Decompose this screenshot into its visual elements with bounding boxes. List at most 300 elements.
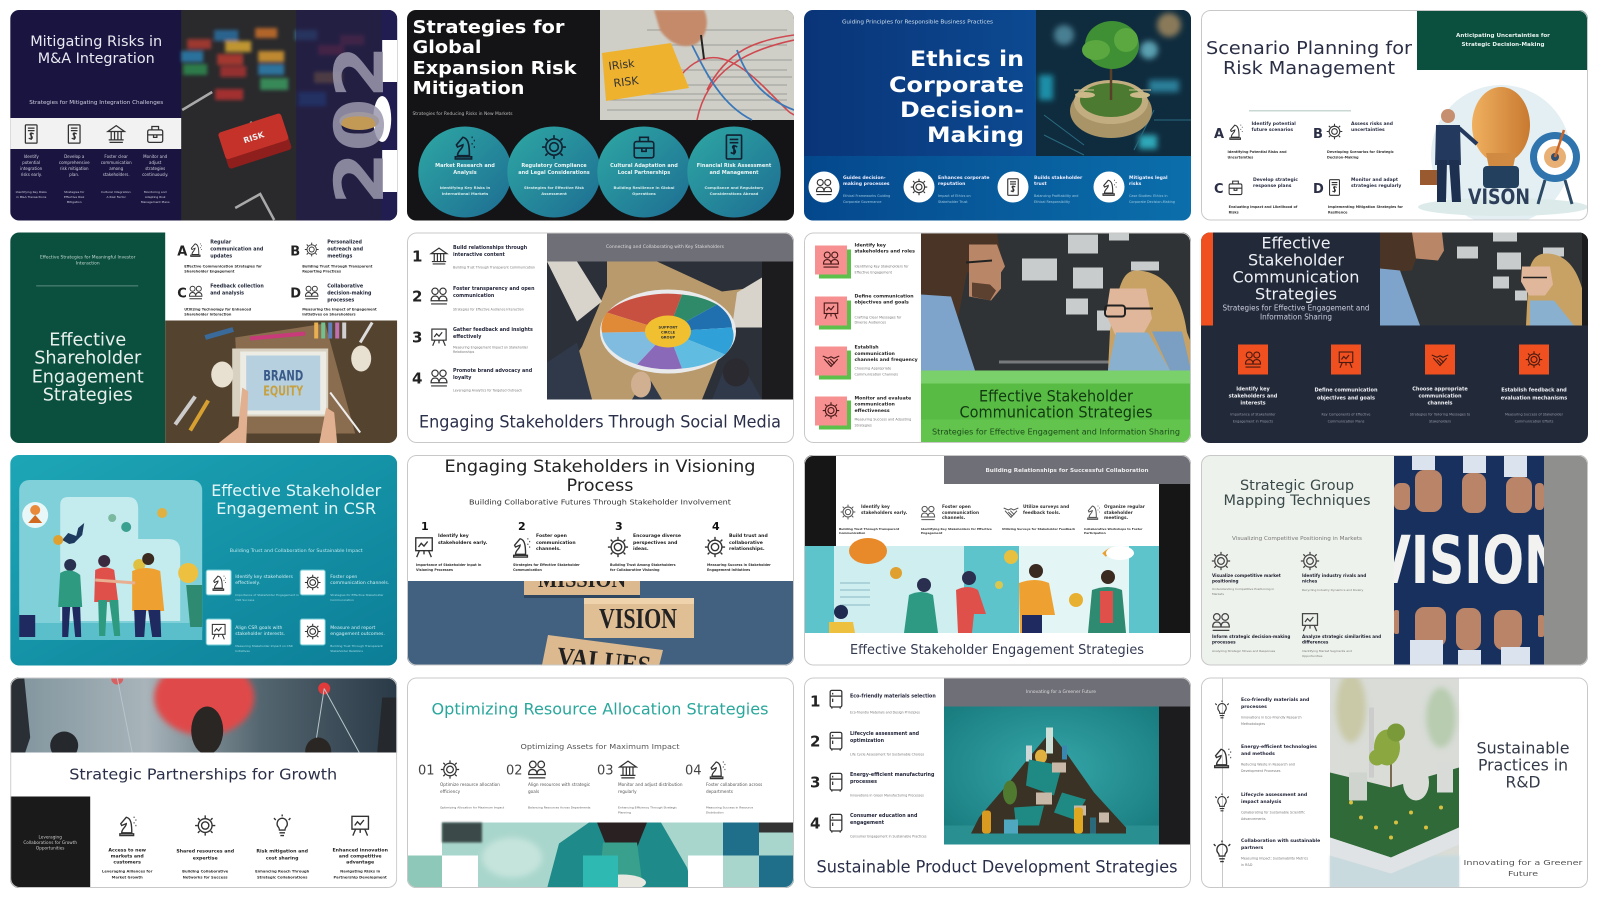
subtitle [1464,859,1583,878]
item 2: Identify industry rivals and [1302,573,1366,578]
icon: document [68,125,80,143]
four steps text: among [109,166,124,171]
icon: appliances [830,814,842,833]
item: trust: Builds stakeholder [1034,175,1083,181]
subtitle: Building Trust and Collaboration for Sustainable Impact [230,548,363,554]
item D: D [1313,182,1324,197]
subtitle: Future [1508,870,1538,878]
item 2 [300,570,389,602]
item 1 [102,817,153,880]
title: Process [566,476,634,496]
photo: colleagues at chalkboard [921,232,1191,370]
item 1: stakeholders and roles [854,248,915,254]
item 02 [506,761,591,810]
item 3 [1410,344,1470,424]
photo: brand equity tablet [165,320,397,444]
item: trust: Balancing Profitability and [1034,194,1078,198]
four steps text: plan. [69,172,79,177]
title: M&A Integration [38,51,155,67]
step 3: Building Trust Among Stakeholders [610,563,676,567]
item A: communication and [210,246,264,252]
photo: brand equity tablet: BRAND [263,368,303,384]
photo: risk sticky note on map: IRisk [608,57,636,73]
title: Optimizing Resource Allocation Strategies [432,700,768,718]
step 2 [513,520,580,572]
item B: B [290,244,300,260]
icon: chart [212,624,225,639]
item C: Feedback collection [210,284,264,290]
step 3 [608,520,681,572]
icon: document [1330,180,1339,195]
item 3: Gather feedback and insights [453,327,533,333]
item 1: customers [113,860,141,866]
item 1: Identify key [861,504,890,510]
item 4: Measure and report [330,625,376,631]
icon: board [1302,614,1318,631]
item 2: communication [453,293,495,299]
oval: Market Research: Analysis [453,170,477,176]
item 2: objectives and goals [1317,396,1375,402]
icon: handshake [1004,508,1018,517]
item 04: departments [706,789,733,794]
item 4: meetings. [1104,515,1129,521]
title [960,386,1152,422]
photo: risk key tiles [181,10,400,220]
item 4: Partnership Development [334,876,387,880]
icon: people [431,370,447,386]
item 03: Planning [618,810,631,814]
icon: briefcase [148,126,163,142]
photo: wooden blocks [407,567,794,681]
icon: knight [191,244,202,256]
item 3: Risk mitigation and [256,848,308,854]
item 2: 2 [810,732,820,750]
item D: Initiatives on Shareholders [302,312,356,316]
title: Engaging Stakeholders in Visioning [444,457,756,477]
icon: briefcase [634,137,654,158]
item 2 [1215,744,1317,773]
item 01: Optimizing Allocation for Maximum Impact [440,806,505,810]
title: Effective Stakeholder [211,481,382,500]
photo: support circle group: SUPPORT [659,326,678,330]
item 04 [685,762,762,814]
item 1: Identify key [854,242,886,248]
item D: Resilience [1328,210,1348,214]
item: decision-making [808,172,890,204]
icon: knight [514,539,530,557]
item 4: Measuring Success and Adjusting [854,418,911,422]
item 4: loyalty [453,375,472,381]
eyebrow: Guiding Principles for Responsible Business Practices [842,20,994,26]
icon: handshake [1432,355,1448,366]
item 3: Strategic Collaborations [257,876,308,880]
step 1: Visioning Processes [416,568,453,572]
item 4: Opportunities [1302,654,1323,658]
oval: Regulatory Compliance [507,126,601,218]
icon: people board [824,303,838,319]
item 3: Innovations in Green Manufacturing Processes [850,794,924,798]
item 1: Innovations in Eco-Friendly Research [1241,716,1302,720]
four steps text: A Risk Factor [107,195,127,199]
item 2: Foster transparency and open [453,286,535,292]
icon: gear [305,624,320,639]
icon: briefcase [1229,181,1242,195]
panel: Engaging Stakeholders Through Social Media [407,232,794,443]
item 2: Networks for Success [183,876,228,880]
title: R&D [1506,772,1540,792]
item 1: Access to new [108,848,147,854]
icon: gear [305,243,319,256]
photo: colleagues at chalkboard [1380,232,1588,326]
title: Mapping Techniques [1224,493,1370,509]
icon: people [824,252,838,267]
icon: knight [1215,749,1231,768]
item 02: goals [528,789,539,794]
panel: Effective Stakeholder Communication Strategies (green) [804,232,1191,444]
four steps text: Strategies for [64,190,85,194]
icon: document [726,135,742,159]
step 1: Importance of Stakeholder Input in [416,563,482,567]
title: Stakeholder [1248,250,1344,270]
item 4: Measuring Success of Stakeholder [1505,412,1564,416]
title [32,330,144,406]
step 4 [705,520,771,572]
four steps text: Develop a [64,154,85,159]
item 4: Communication Efforts [1515,420,1554,424]
icon: board [1339,352,1353,368]
photo: pile of recycled products [944,706,1159,844]
item 3: feedback tools. [1023,510,1061,516]
item: legal risks: Case Studies: Ethics in [1129,194,1168,198]
item 3: Choosing Appropriate [854,366,891,370]
item A: Uncertainties [1228,156,1253,160]
item 4: engagement [850,820,885,826]
illustration: team shaking hands [804,538,1159,633]
item 2: objectives and goals [854,300,909,306]
item 4: partners [1241,845,1264,851]
item 3: Enhancing Reach Through [255,870,310,874]
item A: Shareholder Engagement [184,270,235,274]
item 2: Foster open [942,504,971,510]
item 1: Importance of Stakeholder [1230,412,1276,416]
title [889,47,1024,147]
four steps text: Foster clear [104,154,128,159]
item 4: Promote brand advocacy and [453,368,533,374]
item 3 [1002,504,1076,531]
item 1 [412,245,535,270]
item 2: Building Collaborative [182,870,229,874]
item 4 [332,816,388,880]
item: legal risks [1094,172,1175,204]
item: legal risks: Mitigates legal [1129,175,1168,181]
item B: B [1313,127,1323,142]
item 4: Collaborative Workshops to Foster [1084,527,1143,531]
item 2: channels. [942,515,966,521]
step 4: Engagement Initiatives [707,568,750,572]
four steps text: communication [101,160,132,165]
black caption box: Leveraging [39,834,62,840]
item 2: Recycling Industry Dynamics and Rivalry [1302,588,1364,592]
item B: uncertainties [1351,127,1385,133]
header box: Strategic Decision-Making [1462,42,1544,48]
item C: and analysis [210,290,244,296]
item 03: Monitor and adjust distribution [618,782,683,787]
title: Corporate [889,73,1024,97]
item 4: in R&D [1241,863,1253,867]
item 3: Strategies for Tailoring Messages to [1410,412,1470,416]
item 3 [412,327,533,354]
item 1 [1212,552,1281,596]
item 4 [810,813,927,838]
item C: C [1214,182,1224,197]
item 4: engagement outcomes. [330,631,385,637]
title: Strategies [1255,284,1337,304]
item 3: Establish [854,344,879,350]
item 4 [412,368,533,392]
title: Strategies [43,384,133,406]
item 2 [810,731,924,756]
item 2: Identifying Key Stakeholders for Effective [921,527,992,531]
item 3: channels and frequency [854,357,918,363]
item 4: Participation [1084,531,1106,535]
item 2: Reducing Waste in Research and [1241,762,1295,766]
title: Ethics in [910,47,1024,71]
item 4: Consumer education and [850,813,918,819]
item: reputation [904,172,990,204]
item 4: Stakeholder Relations [330,649,363,653]
item 2: optimization [850,738,885,744]
photo: miniature green city [1330,672,1459,888]
item 4: effectiveness [854,408,890,414]
item 4: differences [1302,640,1329,644]
item 1: processes [1241,704,1267,710]
item 3: Advancements [1241,817,1266,821]
item 3: Initiatives [235,649,250,653]
subtitle: Visualizing Competitive Positioning in Markets [1232,536,1362,542]
item D: strategies regularly [1351,183,1401,189]
oval: Market Research: Identifying Key Risks in [440,185,491,190]
item C: Develop strategic [1253,177,1298,183]
step 4: Measuring Success in Stakeholder [707,563,771,567]
item 1: Effective Engagement [854,270,893,274]
panel: Effective Shareholder Engagement Strategies [10,232,397,444]
item D: Collaborative [327,284,364,290]
subtitle: Interaction [76,260,100,266]
title: Strategies for [412,17,565,38]
oval: Cultural Adaptation: Cultural Adaptation and [610,163,678,169]
header band: Innovating for a Greener Future [1026,689,1096,695]
oval: Regulatory Compliance: Regulatory Compliance [521,163,587,169]
panel: Mitigating Risks in M&A Integration [10,10,400,220]
item 03: regularly [618,789,637,794]
icon: pin [1008,179,1018,195]
title [30,34,162,67]
item C [177,284,264,316]
item B: meetings [327,254,352,260]
item 2: Energy-efficient technologies [1241,744,1317,750]
oval: Financial Risk: Considerations Abroad [710,191,759,196]
icon: worker [529,761,545,778]
item 4: and competitive [339,854,382,860]
item 2 [815,294,914,330]
icon: gear [705,537,725,557]
item 3: 3 [810,774,820,792]
item B: Personalized [327,240,362,246]
four steps text: Monitor and [143,154,168,159]
icon: people [1246,352,1260,367]
item 2: Development Processes [1241,769,1281,773]
item B: Decision-Making [1327,156,1359,160]
title: Practices in [1478,756,1568,774]
four steps text: continuously. [142,172,168,177]
item B: Developing Scenarios for Strategic [1327,150,1394,154]
step 1: 1 [421,520,429,533]
item 3: Utilize surveys and [1023,504,1069,510]
icon: gear [823,402,839,419]
item 2: Strategies for Effective Stakeholder [330,593,384,597]
oval: Cultural Adaptation: Building Resilience in Global [614,185,674,190]
four steps text: adjust [149,160,162,165]
icon: gear [195,815,215,836]
item 4 [300,619,385,653]
item 2: communication channels. [330,580,389,586]
title [211,481,382,518]
item 3: stakeholder interests. [235,631,285,637]
item A: A [177,244,187,260]
icon: gear [1212,552,1230,570]
item 1: Eco-friendly materials selection [850,694,936,700]
item A [177,240,264,274]
step 2: 2 [518,520,526,533]
item A: Regular [210,240,232,246]
title: Engagement [32,366,144,388]
four steps text: Cultural Integration: [101,190,131,194]
four steps text: Monitoring and [144,190,167,194]
item 1: Market Growth [112,876,143,880]
panel: Strategic Group Mapping Techniques [1201,455,1588,666]
oval: Regulatory Compliance: and Legal Considerations [518,170,590,176]
black blocks [804,455,1191,633]
panel: Strategic Partnerships for Growth [10,660,397,888]
illustration: vision bulb, man and target [1418,85,1588,225]
icon: people [1213,614,1229,630]
item 2: niches [1302,578,1318,584]
black caption box [10,796,90,888]
item 3: impact analysis [1241,799,1282,805]
step 1: Identify key [438,533,469,539]
item D: Measuring the Impact of Engagement [302,308,377,312]
icon: fridge [830,773,842,792]
title: Mitigation [412,78,525,99]
item 4: Navigating Risks in [340,870,381,874]
illustration: vision bulb, man and target: VISON [1468,185,1530,209]
item: reputation: Stakeholder Trust [938,200,968,204]
icon: bulb [1215,794,1229,811]
step 4: relationships. [729,546,765,552]
red risk key [218,113,292,169]
item: trust: Ethical Responsibility [1034,200,1070,204]
item 3 [255,814,310,880]
item: reputation: reputation [938,181,965,187]
item 2: Communication [330,598,354,602]
title: Decision- [900,98,1024,122]
item 2 [176,815,234,880]
item 1: 1 [810,692,820,710]
subtitle: Strategies for Effective Engagement and Information Sharing [932,428,1180,436]
item 1 [1215,697,1309,726]
item: decision-making: Guides decision- [843,175,886,181]
item 4: advantage [346,860,374,866]
item 4: Consumer Engagement in Sustainable Practices [850,834,927,838]
icon: person [305,286,318,299]
step 2: communication [536,540,576,546]
title [1232,234,1360,304]
oval: Financial Risk [687,126,781,218]
item 4: Leveraging Analytics for Targeted Outreach [453,388,522,392]
item 2 [1301,552,1366,592]
item: legal risks: risks [1129,181,1142,187]
oval: Regulatory Compliance: Strategies for Effective Risk [524,185,584,190]
item: trust [998,172,1083,204]
item 2 [921,504,992,535]
title: Strategic Group [1240,478,1354,494]
item D: Monitor and adapt [1351,177,1399,183]
black caption box: Collaborations for Growth [23,840,77,845]
item 1 [810,690,936,714]
item 3 [1212,614,1290,653]
step 4: Build trust and [729,533,768,539]
item 1: interactive content [453,252,506,258]
title: Shareholder [34,348,142,368]
item 3: Choose appropriate [1412,386,1468,392]
item 3: Utilizing Surveys for Stakeholder Feedback [1002,527,1076,531]
item 1: Eco-friendly Materials and Design Principles [850,710,920,714]
item 3: Measuring Stakeholder Impact on CSR [235,644,293,648]
step 2: Communication [513,568,543,572]
icon: gear brain [542,135,566,159]
subtitle: Innovating for a Greener [1464,859,1583,867]
icon: bulb [274,814,290,836]
icon: safe [25,125,37,143]
photo: support circle group: CIRCLE [661,330,676,334]
subtitle: Effective Strategies for Meaningful Investor [40,254,136,260]
four steps text: risks early. [21,172,42,177]
sidebar [10,232,165,443]
photo: risk sticky note on map: RISK [613,74,640,90]
icon: knight [1088,506,1100,519]
item C: response plans [1253,183,1292,189]
item 3: cost sharing [266,856,298,862]
item 4: Enhanced innovation [332,848,388,854]
item 02: Balancing Resources Across Departments [528,806,591,810]
item 03: Enhancing Efficiency Through Strategic [618,806,677,810]
oval: Regulatory Compliance: Assessment [541,191,567,196]
item 2: Define communication [854,294,914,300]
item 2: Lifecycle assessment and [850,731,920,737]
accent bar [1201,232,1213,326]
panel: Effective Stakeholder Communication Strategies (dark) [1201,232,1588,443]
item 04: Foster collaboration across [706,782,762,787]
icon: gear [441,760,459,779]
item 1: Importance of Stakeholder Engagement in [235,593,299,597]
item B: Assess risks and [1351,121,1393,127]
item: reputation: Impact of Ethics on [938,194,971,198]
item 4 [815,396,911,430]
header band: Building Relationships for Successful Collaboration [986,468,1149,474]
item 1 [1229,344,1278,424]
icon: knight [455,137,475,159]
icon: person [816,180,832,194]
